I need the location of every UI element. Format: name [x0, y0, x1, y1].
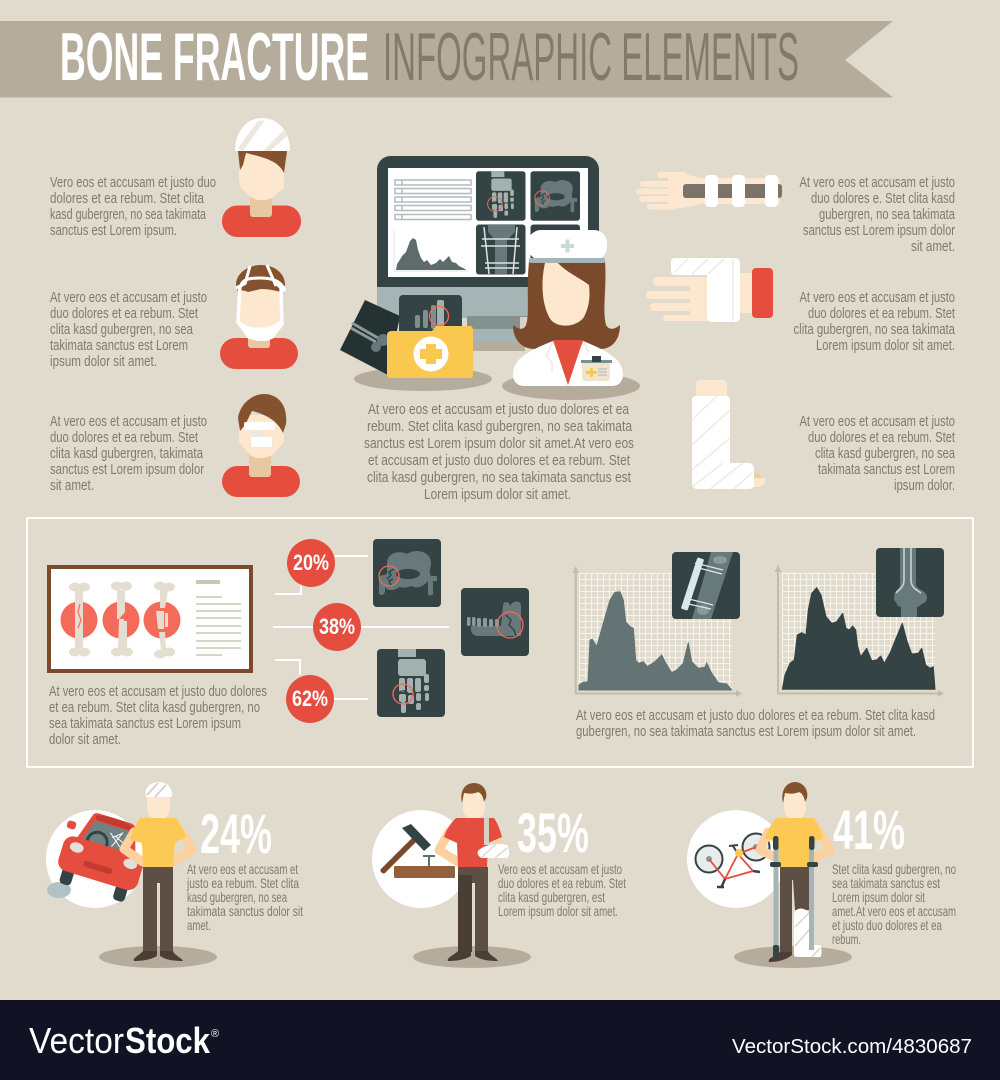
text block: head injury 3 — [50, 413, 207, 494]
bone 1 — [69, 582, 90, 656]
board text lines — [196, 582, 241, 655]
cap — [528, 230, 607, 260]
text block: bandaged hand: duo dolores et ea rebum. Stet — [808, 305, 956, 322]
pants — [780, 867, 809, 952]
axes — [778, 571, 939, 694]
small histogram — [394, 230, 468, 271]
text block: center: Lorem ipsum dolor sit amet. — [424, 486, 571, 503]
stat: 41%: 41% — [833, 798, 905, 861]
grid — [579, 573, 732, 690]
watermark url: VectorStock.com/4830687 — [732, 1036, 972, 1058]
stat: 20%: 20% — [293, 550, 329, 575]
icon: patient with jaw bandage — [220, 265, 298, 369]
bone 2 — [111, 582, 133, 656]
text block: leg cast: ipsum dolor. — [894, 477, 955, 494]
text block: chart caption — [576, 707, 935, 740]
text block: car accident: kasd gubergren, no sea — [187, 889, 287, 905]
section: car accident — [46, 782, 303, 968]
person: bandaged head — [99, 782, 217, 968]
text block: head injury 3: duo dolores et ea rebum. Stet — [50, 429, 199, 446]
text block: center: rebum. Stet clita kasd gubergren, no sea takimata — [367, 418, 633, 435]
x-ray: pinned bone — [672, 552, 740, 619]
text block: bicycle accident — [832, 861, 956, 947]
grid — [782, 573, 935, 690]
board: fracture types — [49, 567, 251, 671]
stat: 38%: 38% — [319, 614, 355, 639]
badge — [581, 356, 612, 381]
text block: leg cast: duo dolores et ea rebum. Stet — [808, 429, 956, 446]
text block: head injury 1 — [50, 174, 216, 239]
text block: car accident: At vero eos et accusam et — [187, 861, 298, 877]
text block: head injury 3: sit amet. — [50, 477, 94, 494]
icon: crashed car — [47, 806, 154, 905]
text block: car accident: amet. — [187, 917, 211, 933]
monitor with x-ray results — [377, 156, 599, 351]
text block: center: clita kasd gubergren, no sea takimata sanctus est — [367, 469, 632, 486]
text block: splinted arm: sit amet. — [911, 238, 955, 255]
nurse — [502, 230, 640, 400]
crutches — [774, 838, 814, 950]
text block: bicycle accident: et justo duo dolores et ea — [832, 917, 942, 933]
icon: splinted arm — [636, 172, 782, 210]
icon: patient with head bandage — [222, 118, 301, 237]
text block: center: At vero eos et accusam et justo duo dolores et ea — [368, 401, 630, 418]
text block: work injury: clita kasd gubergren, est — [498, 889, 605, 905]
text block: center: et accusam et justo duo dolores et ea rebum. Stet — [368, 452, 631, 469]
leg cast — [794, 908, 822, 957]
watermark logo — [29, 1020, 219, 1061]
icon: leg cast — [692, 380, 765, 489]
text block: board caption — [49, 683, 267, 748]
text block: head injury 2: ipsum dolor sit amet. — [50, 353, 157, 370]
x-ray: fixated leg — [476, 224, 526, 274]
text block: head injury 1: sanctus est Lorem ipsum. — [50, 222, 177, 239]
text block: head injury 3: At vero eos et accusam et justo — [50, 413, 207, 430]
text block: bicycle accident: Lorem ipsum dolor sit — [832, 889, 925, 905]
x-ray: pelvis — [373, 539, 441, 607]
stat: 35%: 35% — [517, 801, 589, 864]
text block: head injury 1: Vero eos et accusam et justo duo — [50, 174, 216, 191]
chart: left histogram — [572, 566, 742, 697]
folder — [387, 326, 473, 378]
folder with x-rays — [340, 295, 492, 391]
text block: leg cast: takimata sanctus est Lorem — [818, 461, 955, 478]
icon: patient with nose bandage — [222, 394, 300, 497]
text block: work injury: duo dolores et ea rebum. Stet — [498, 875, 626, 891]
x-ray hand film — [399, 295, 462, 335]
white circle — [46, 810, 144, 908]
white circle — [687, 810, 785, 908]
text block: work injury: Lorem ipsum dolor sit amet. — [498, 903, 618, 919]
text block: splinted arm: gubergren, no sea takimata — [819, 206, 955, 223]
text block: car accident: takimata sanctus dolor sit — [187, 903, 303, 919]
text block: head injury 1: kasd gubergren, no sea takimata — [50, 206, 206, 223]
footer bar — [0, 1000, 1000, 1080]
person: arm in sling — [413, 783, 531, 968]
text block: car accident — [186, 861, 303, 933]
text block: head injury 3: sanctus est Lorem ipsum dolor — [50, 461, 204, 478]
icon: bicycle — [696, 834, 770, 888]
x-ray: hand — [377, 649, 445, 717]
black x-ray film — [340, 300, 400, 375]
text block: head injury 2: At vero eos et accusam et justo — [50, 289, 207, 306]
text block: bandaged hand — [794, 289, 956, 354]
text block: splinted arm — [800, 174, 955, 255]
panel: fracture statistics — [27, 518, 973, 767]
text block: head injury 2: clita kasd gubergren, no sea — [50, 321, 193, 338]
icon: bandaged hand — [646, 258, 773, 322]
text block: head injury 2: duo dolores et ea rebum. Stet — [50, 305, 199, 322]
watermark logo: ® — [211, 1028, 219, 1040]
stat: 38% — [313, 603, 361, 651]
text block: board caption: et ea rebum. Stet clita kasd gubergren, no — [49, 699, 260, 716]
section: work injury — [372, 783, 626, 968]
text block: work injury: Vero eos et accusam et justo — [498, 861, 622, 877]
stat: 62% — [286, 675, 334, 723]
text block: center: sanctus est Lorem ipsum dolor sit amet.At vero eos — [364, 435, 634, 452]
stat: 24%: 24% — [200, 802, 272, 865]
title: BONE FRACTURE — [60, 19, 369, 95]
axes — [576, 571, 738, 694]
text block: center — [364, 401, 634, 503]
text block: board caption: At vero eos et accusam et justo duo dolores — [49, 683, 267, 700]
text block: board caption: sea takimata sanctus est Lorem ipsum — [49, 715, 241, 732]
banner — [0, 19, 893, 98]
section: bicycle accident — [687, 782, 956, 968]
text block: leg cast: clita kasd gubergren, no sea — [815, 445, 955, 462]
text block: work injury — [498, 861, 626, 919]
text block: head injury 1: dolores et ea rebum. Stet clita — [50, 190, 204, 207]
icon: hammer and nail — [380, 824, 455, 878]
x-ray: jaw — [461, 588, 529, 656]
stat: 20% — [287, 539, 335, 587]
text block: leg cast — [800, 413, 956, 494]
person: crutches — [734, 782, 852, 968]
x-ray: knee — [876, 548, 944, 617]
text block: car accident: justo ea rebum. Stet clita — [186, 875, 299, 891]
text block: bicycle accident: rebum. — [832, 931, 861, 947]
white circle — [372, 810, 470, 908]
face — [543, 263, 589, 326]
text block: head injury 3: clita kasd gubergren, takimata — [50, 445, 203, 462]
connector lines — [273, 556, 449, 699]
text block: board caption: dolor sit amet. — [49, 731, 121, 748]
chart: right histogram — [774, 565, 944, 697]
text block: head injury 2 — [50, 289, 207, 370]
bone 3 — [154, 582, 175, 658]
form rows — [395, 180, 471, 220]
text block: bicycle accident: sea takimata sanctus est — [832, 875, 940, 891]
hair — [513, 262, 620, 349]
watermark logo: Stock — [125, 1020, 211, 1061]
text block: splinted arm: duo dolores e. Stet clita kasd — [811, 190, 955, 207]
text block: bandaged hand: Lorem ipsum dolor sit amet. — [816, 337, 955, 354]
text block: head injury 2: takimata sanctus est Lorem — [50, 337, 188, 354]
stat: 62%: 62% — [292, 686, 328, 711]
coat — [513, 341, 623, 386]
watermark logo: Vector — [29, 1020, 124, 1061]
